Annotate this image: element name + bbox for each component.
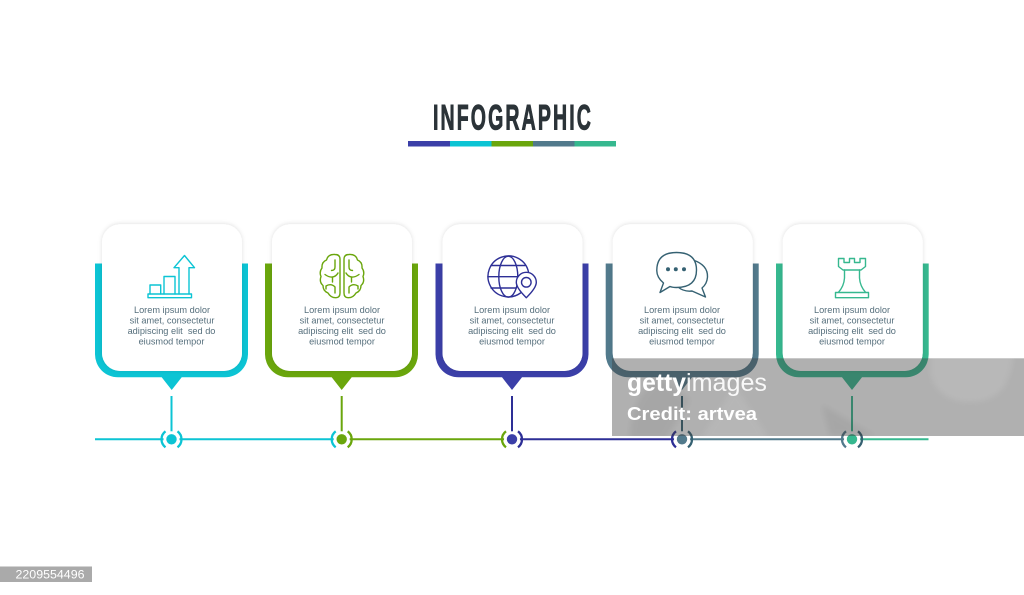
text block: sit amet, consectetur: [300, 316, 384, 326]
text block: sit amet, consectetur: [470, 316, 554, 326]
watermark logo: [627, 369, 767, 397]
panel: step 3: [435, 224, 589, 439]
text block: adipiscing elit sed do: [128, 326, 215, 336]
text block: eiusmod tempor: [139, 336, 204, 346]
text block: [808, 305, 896, 346]
icon: speech bubbles: [657, 252, 708, 297]
coloured frame: [265, 264, 418, 390]
icon: chess rook: [836, 258, 868, 298]
marker 3: [502, 431, 522, 447]
icon: brain: [320, 254, 364, 298]
icon: globe with pin: [488, 256, 536, 298]
text block: Lorem ipsum dolor: [814, 305, 890, 315]
text block: adipiscing elit sed do: [298, 326, 386, 336]
marker 2: [332, 431, 352, 447]
connector: [341, 396, 343, 439]
connector: [851, 396, 853, 439]
coloured frame: [435, 264, 589, 390]
text block: eiusmod tempor: [649, 336, 715, 346]
title: INFOGRAPHIC: [433, 99, 591, 138]
title colour bar: [408, 141, 616, 146]
text block: [638, 305, 726, 346]
white card: [783, 224, 923, 371]
text block: sit amet, consectetur: [640, 316, 724, 326]
white card: [102, 224, 242, 371]
white card: [613, 224, 753, 371]
white card: [272, 224, 412, 371]
coloured frame: [95, 264, 248, 390]
text block: Lorem ipsum dolor: [474, 305, 550, 315]
text block: eiusmod tempor: [479, 336, 545, 346]
image id badge: 2209554496: [16, 569, 84, 581]
white card: [442, 224, 582, 371]
text block: sit amet, consectetur: [130, 316, 214, 326]
watermark logo: getty: [627, 369, 686, 397]
panel: step 5: [776, 224, 929, 439]
connector: [511, 396, 513, 439]
text block: Lorem ipsum dolor: [644, 305, 720, 315]
coloured frame: [606, 264, 759, 390]
watermark logo: images: [686, 369, 767, 397]
text block: adipiscing elit sed do: [468, 326, 556, 336]
text block: [468, 305, 556, 346]
marker 4: [672, 431, 692, 447]
text block: sit amet, consectetur: [810, 316, 894, 326]
text block: adipiscing elit sed do: [808, 326, 896, 336]
text block: [128, 305, 215, 346]
marker 1: [161, 431, 181, 447]
watermark credit: Credit: artvea: [627, 404, 758, 424]
watermark band: [612, 350, 1024, 440]
text block: adipiscing elit sed do: [638, 326, 726, 336]
connector: [681, 396, 683, 439]
text block: Lorem ipsum dolor: [134, 305, 210, 315]
text block: [298, 305, 386, 346]
panel: step 4: [606, 224, 759, 439]
image id badge: [0, 566, 92, 582]
panel: step 2: [265, 224, 418, 439]
connector: [170, 396, 172, 439]
text block: eiusmod tempor: [819, 336, 885, 346]
text block: Lorem ipsum dolor: [304, 305, 380, 315]
timeline: [95, 438, 928, 440]
icon: growth chart: [148, 256, 194, 298]
marker 5: [842, 431, 862, 447]
coloured frame: [776, 264, 929, 390]
text block: eiusmod tempor: [309, 336, 375, 346]
panel: step 1: [95, 224, 248, 439]
